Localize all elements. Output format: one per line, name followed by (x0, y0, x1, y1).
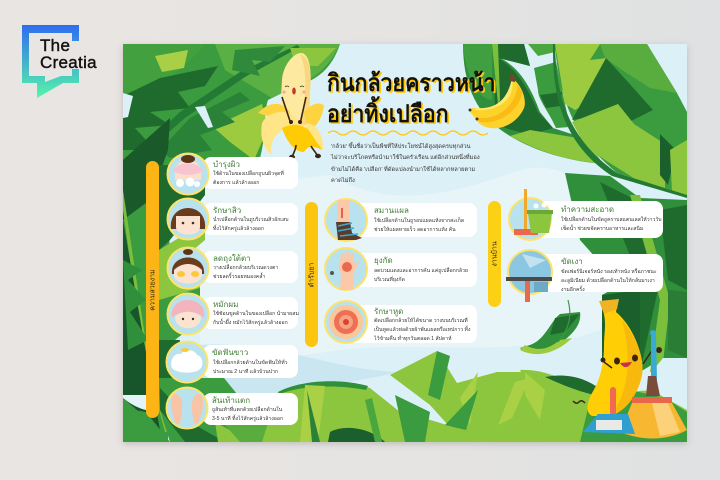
item: eye bags: วางเปลือกกล้วยบริเวณดวงตา (213, 265, 278, 271)
leaf: right large (553, 44, 687, 198)
intro text (330, 142, 480, 184)
sky swirl (160, 168, 620, 420)
item: cleaning: ทำความสะอาด (561, 205, 614, 214)
category bar: household (488, 201, 501, 307)
poster (123, 44, 687, 442)
item: acne: รักษาสิว (213, 206, 241, 215)
item: mosquito bite: ยุงกัด (374, 256, 393, 265)
item: warts: ตัดเปลือกกล้วยให้ได้ขนาด วางบนบริเวณที่ (374, 318, 468, 324)
item: cleaning (508, 189, 663, 241)
leaf: lower left (123, 378, 280, 442)
item: mosquito bite (324, 247, 477, 291)
item: mosquito bite: บริเวณที่ยุงกัด (374, 277, 405, 283)
item: acne: ทิ้งไว้สักครู่แล้วล้างออก (213, 226, 264, 232)
item: polish: อะลูมิเนียม ด้วยเปลือกด้านในให้กลับมาเงา (561, 278, 655, 284)
item: wound: ช่วยให้แผลหายเร็ว ลดอาการแห้ง คัน (374, 227, 456, 233)
item: acne: นำเปลือกด้านในถูบริเวณสิวอักเสบ (213, 217, 288, 223)
item: hair mask: ใช้ช้อนขูดด้านในของเปลือก นำมาผสม (213, 311, 299, 317)
intro text: ไม่ว่าจะบริโภคหรือนำมาใช้ในครัวเรือน แต่อีกส่วนหนึ่งที่มอง (331, 155, 480, 161)
item: acne (166, 198, 298, 240)
category bar: medicine: ตำรับยา (308, 262, 315, 287)
item: skin care: ต้องการ แล้วล้างออก (213, 180, 259, 186)
leaf: bottom centre (262, 381, 482, 442)
item: warts: รักษาหูด (374, 307, 403, 316)
item: white teeth: ใช้เปลือกกล้วยด้านในขัดฟันให้ทั่ว (213, 360, 287, 366)
item: cracked heels: ถูส้นเท้าที่แตกด้วยเปลือกด้านใน (212, 407, 282, 413)
item: eye bags (166, 246, 298, 290)
item: eye bags: ช่วยลดริ้วรอยหมองคล้ำ (213, 274, 265, 280)
item: white teeth (166, 340, 298, 384)
logo: The Creatia: Creatia (40, 53, 97, 72)
panel: beauty (146, 152, 299, 430)
item: cleaning: เช็ดน้ำ ช่วยขจัดคราบอาหารและสนิม (561, 226, 643, 232)
item: polish: ขัดเงา (561, 257, 583, 266)
item: mosquito bite: ลดบวมแดงและอาการคัน แค่ถูเปลือกกล้วย (374, 268, 468, 274)
panel: medicine (305, 198, 477, 347)
item: warts (324, 300, 477, 344)
leaf: bottom right of centre (390, 351, 600, 442)
item: white teeth: ประมาณ 2 นาที แล้วบ้วนปาก (213, 369, 278, 375)
item: skin care (166, 152, 298, 196)
title (327, 70, 496, 128)
wavy divider (328, 130, 488, 136)
item: wound: ใช้เปลือกด้านในถูรอบแผลแห้งจากสะเก็ด (374, 218, 464, 224)
item: eye bags: ลดถุงใต้ตา (213, 254, 251, 263)
item: hair mask (166, 292, 299, 336)
item: wound: สมานแผล (374, 206, 409, 215)
leaf: small centre right (520, 300, 580, 354)
title: กินกล้วยคราวหน้า (327, 70, 496, 97)
logo: The Creatia (22, 25, 97, 98)
item: polish (506, 249, 663, 302)
category bar: beauty: ความสวยงาม (149, 269, 156, 311)
intro text: คาดไม่ถึง (331, 178, 355, 184)
item: polish: งามอีกครั้ง (561, 287, 585, 293)
panel: household (488, 189, 663, 307)
item: skin care: ใช้ด้านในของเปลือกถูบนผิวจุดที่ (213, 171, 284, 177)
item: polish: ขัดเฟอร์นิเจอร์หนัง รองเท้าหนัง หรือภาชนะ (561, 269, 657, 275)
category bar: household: งานบ้าน (491, 241, 498, 267)
item: cracked heels: ส้นเท้าแตก (212, 396, 250, 405)
item: warts: เป็นหูดแล้วห่อด้วยผ้าพันแผลหรือเทปกาว ทิ้ง (374, 327, 470, 333)
intro text: 'กล้วย' ขึ้นชื่อว่าเป็นพืชที่ให้ประโยชน์ได้สูงสุดครบทุกส่วน (331, 144, 471, 150)
item: wound (324, 198, 477, 242)
item: hair mask: หมักผม (213, 300, 238, 309)
item: warts: ไว้ข้ามคืน ทำทุกวันตลอด 1 สัปดาห์ (374, 336, 451, 342)
bunch of bananas (468, 74, 525, 128)
item: cleaning: ใช้เปลือกด้านในขัดถูคราบสแตนเลสให้วาววับ (561, 217, 662, 223)
leaf: top right behind banana (463, 44, 602, 164)
leaf artwork (123, 44, 687, 442)
item: white teeth: ขัดฟันขาว (212, 348, 248, 357)
title: อย่าทิ้งเปลือก (327, 101, 449, 128)
mop banana character (572, 299, 687, 438)
logo: The Creatia: The (40, 36, 70, 55)
item: cracked heels: 3-5 นาที ทิ้งไว้สักครู่แล้วล้างออก (212, 416, 283, 422)
item: hair mask: กับน้ำผึ้ง หมักไว้สักครู่แล้วล้างออก (213, 320, 288, 326)
intro text: ข้ามไม่ได้คือ 'เปลือก' ที่ดัดแปลงนำมาใช้ได้หลากหลายตาม (331, 167, 475, 173)
category bar: medicine (305, 202, 318, 347)
leaf: top left (123, 44, 340, 440)
leaf: bottom right (520, 370, 687, 442)
leaf: top right strip (528, 44, 570, 128)
banana character (258, 53, 324, 158)
leaf: right lower (565, 173, 687, 404)
item: skin care: บำรุงผิว (213, 160, 240, 169)
category bar: beauty (146, 161, 159, 418)
item: cracked heels (166, 386, 298, 430)
